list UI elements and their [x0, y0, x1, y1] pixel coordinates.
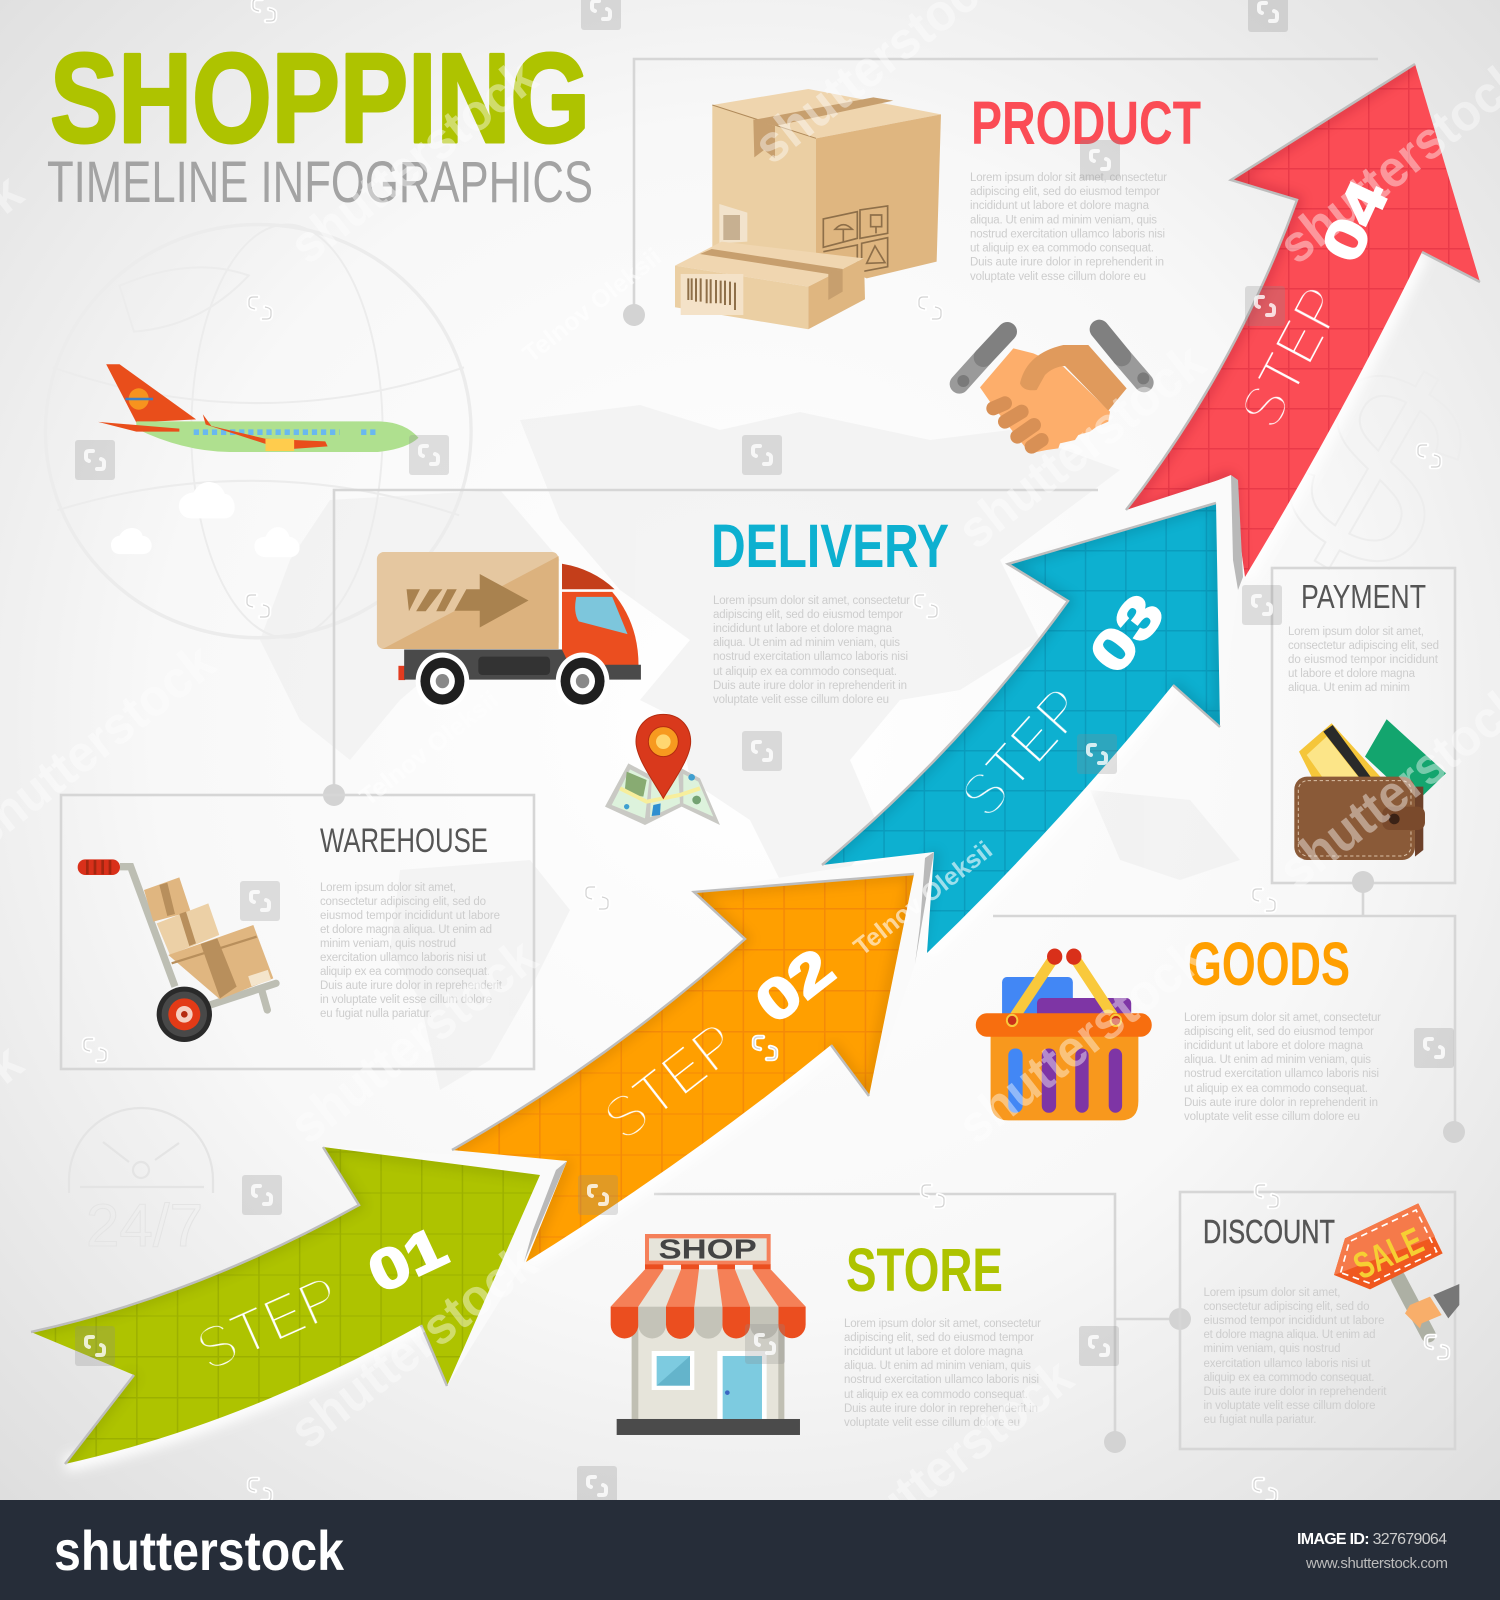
icon: wallet with card and cash	[1294, 719, 1446, 860]
panel: payment text: do eiusmod tempor incididunt	[1288, 654, 1439, 666]
paper flap over red arrow	[1008, 475, 1243, 727]
panel: goods text: ut aliquip ex ea commodo consequat.	[1184, 1083, 1368, 1095]
panel: goods text: nostrud exercitation ullamco laboris nisi	[1184, 1068, 1379, 1080]
panel: store text: aliqua. Ut enim ad minim veniam, quis	[844, 1360, 1031, 1372]
watermark text: Telnov Oleksii	[848, 836, 998, 961]
arrow: step 04 red: STEP	[1227, 275, 1356, 439]
panel: goods text: Duis aute irure dolor in reprehenderit in	[1184, 1097, 1378, 1109]
panel: product text: Lorem ipsum dolor sit amet, consectetur	[970, 172, 1167, 184]
icon: shop storefront: SHOP	[658, 1233, 757, 1264]
panel: goods text: aliqua. Ut enim ad minim veniam, quis	[1184, 1054, 1371, 1066]
panel: delivery text: Duis aute irure dolor in reprehenderit in	[713, 680, 907, 692]
watermark text: Telnov Oleksii	[517, 243, 667, 368]
panel: payment text: Lorem ipsum dolor sit amet,	[1288, 626, 1424, 638]
panel: delivery text: incididunt ut labore et dolore magna	[713, 623, 893, 635]
product connector	[623, 59, 1378, 326]
arrow: step 02 orange	[452, 874, 914, 1262]
panel: product text: voluptate velit esse cillum dolore eu	[970, 271, 1146, 283]
icon: sale sign in hand	[1334, 1203, 1459, 1335]
panel: product text: ut aliquip ex ea commodo consequat.	[970, 242, 1154, 254]
arrow: step 01 green: STEP	[186, 1262, 350, 1385]
panel: delivery text: nostrud exercitation ullamco laboris nisi	[713, 651, 908, 663]
panel: warehouse text: eiusmod tempor incididunt ut labore	[320, 910, 500, 922]
store connector	[654, 1194, 1191, 1453]
panel: store text: nostrud exercitation ullamco laboris nisi	[844, 1374, 1039, 1386]
website: www.shutterstock.com	[1305, 1555, 1448, 1572]
panel: warehouse text: exercitation ullamco laboris nisi ut	[320, 952, 487, 964]
panel: discount text: exercitation ullamco laboris nisi ut	[1204, 1358, 1371, 1370]
panel: store text: adipiscing elit, sed do eiusmod tempor	[844, 1332, 1034, 1344]
panel: discount text	[1203, 1213, 1387, 1426]
watermark text: Telnov Oleksii	[354, 686, 504, 811]
arrow: step 03 blue: STEP	[947, 674, 1097, 830]
panel: warehouse text	[320, 822, 503, 1020]
panel: goods text: Lorem ipsum dolor sit amet, consectetur	[1184, 1012, 1381, 1024]
panel: goods text: voluptate velit esse cillum dolore eu	[1184, 1111, 1360, 1123]
panel: discount text: DISCOUNT	[1203, 1213, 1335, 1250]
panel: discount text: Duis aute irure dolor in reprehenderit	[1204, 1386, 1387, 1398]
arrow: step 02 orange: STEP	[591, 1009, 750, 1154]
watermark text: shutterstock	[279, 1233, 548, 1460]
panel: warehouse text: Lorem ipsum dolor sit amet,	[320, 882, 456, 894]
panel: product text	[970, 89, 1201, 283]
panel: payment text: consectetur adipiscing elit, sed	[1288, 640, 1439, 652]
icon: airplane	[98, 364, 419, 452]
footer logo: shutterstock	[54, 1519, 345, 1582]
panel: delivery text: aliqua. Ut enim ad minim veniam, quis	[713, 637, 900, 649]
panel: payment text	[1288, 578, 1439, 694]
icon: sale sign in hand: SALE	[1347, 1219, 1430, 1287]
watermark text: shutterstock	[947, 928, 1216, 1155]
panel: store text: Duis aute irure dolor in reprehenderit in	[844, 1403, 1038, 1415]
panel: discount text: eu fugiat nulla pariatur.	[1204, 1414, 1316, 1426]
panel: discount text: consectetur adipiscing elit, sed do	[1204, 1301, 1370, 1313]
paper flap over blue arrow	[694, 852, 934, 1096]
panel: delivery text: ut aliquip ex ea commodo consequat.	[713, 666, 897, 678]
discount frame	[1180, 1192, 1455, 1449]
footer bar	[0, 1500, 1500, 1600]
watermark text: shutterstock	[815, 1348, 1084, 1575]
panel: delivery text: Lorem ipsum dolor sit amet, consectetur	[713, 595, 910, 607]
24/7 clock watermark	[69, 1108, 213, 1259]
icon: shopping basket	[976, 948, 1152, 1120]
paper flap over orange arrow	[323, 1147, 567, 1386]
panel: product text: incididunt ut labore et dolore magna	[970, 200, 1150, 212]
subtitle: TIMELINE INFOGRAPHICS	[47, 150, 593, 215]
panel: warehouse text: Duis aute irure dolor in reprehenderit	[320, 980, 503, 992]
icon: map and pin	[605, 714, 720, 825]
panel: warehouse text: et dolore magna aliqua. Ut enim ad	[320, 924, 492, 936]
arrow: step 03 blue	[822, 503, 1220, 964]
panel: product text: nostrud exercitation ullamco laboris nisi	[970, 228, 1165, 240]
title: shopping: SHOPPING	[50, 27, 590, 169]
panel: store text: STORE	[846, 1236, 1003, 1304]
goods connector	[993, 916, 1465, 1143]
icon: hand truck with boxes	[78, 859, 276, 1042]
arrow: step 03 blue: 03	[1077, 582, 1176, 684]
panel: delivery text: voluptate velit esse cillum dolore eu	[713, 694, 889, 706]
panel: discount text: et dolore magna aliqua. Ut enim ad	[1204, 1329, 1376, 1341]
panel: goods text: incididunt ut labore et dolore magna	[1184, 1040, 1364, 1052]
icon: shop storefront	[611, 1233, 806, 1435]
icon: cardboard boxes	[675, 89, 941, 329]
arrow: step 04 red	[1125, 63, 1480, 577]
globe watermark	[45, 224, 471, 638]
panel: payment text: PAYMENT	[1301, 578, 1426, 615]
panel: product text: aliqua. Ut enim ad minim veniam, quis	[970, 214, 1157, 226]
panel: discount text: minim veniam, quis nostrud	[1204, 1343, 1340, 1355]
panel: store text: voluptate velit esse cillum dolore eu	[844, 1417, 1020, 1429]
panel: delivery text: DELIVERY	[711, 512, 949, 580]
arrow: step 04 red: 04	[1309, 172, 1400, 271]
panel: store text: Lorem ipsum dolor sit amet, consectetur	[844, 1318, 1041, 1330]
panel: store text: ut aliquip ex ea commodo consequat.	[844, 1389, 1028, 1401]
panel: warehouse text: eu fugiat nulla pariatur.	[320, 1008, 432, 1020]
panel: goods text: adipiscing elit, sed do eiusmod tempor	[1184, 1026, 1374, 1038]
watermark text: shutterstock	[279, 48, 548, 275]
arrow: step 02 orange: 02	[743, 936, 845, 1035]
panel: discount text: in voluptate velit esse cillum dolore	[1204, 1400, 1376, 1412]
watermark text: shutterstock	[279, 928, 548, 1155]
panel: payment text: aliqua. Ut enim ad minim	[1288, 682, 1410, 694]
panel: discount text: eiusmod tempor incididunt ut labore	[1204, 1315, 1384, 1327]
panel: product text: adipiscing elit, sed do eiusmod tempor	[970, 186, 1160, 198]
panel: goods text: GOODS	[1188, 930, 1350, 998]
icon: clouds	[111, 482, 300, 557]
icon: delivery truck	[377, 552, 641, 710]
panel: product text: PRODUCT	[971, 89, 1201, 157]
panel: delivery text	[711, 512, 949, 706]
world map watermark	[260, 405, 1240, 1090]
warehouse frame	[61, 795, 534, 1069]
panel: warehouse text: in voluptate velit esse cillum dolore	[320, 994, 492, 1006]
panel: payment text: ut labore et dolore magna	[1288, 668, 1416, 680]
panel: product text: Duis aute irure dolor in reprehenderit in	[970, 256, 1164, 268]
watermark text: shutterstock	[947, 333, 1216, 560]
image id: IMAGE ID: 327679064	[1297, 1531, 1447, 1548]
24/7 clock watermark: 24/7	[86, 1192, 203, 1259]
panel: warehouse text: minim veniam, quis nostrud	[320, 938, 456, 950]
payment frame	[1272, 568, 1455, 916]
panel: warehouse text: aliquip ex ea commodo consequat.	[320, 966, 490, 978]
panel: discount text: Lorem ipsum dolor sit amet,	[1204, 1287, 1340, 1299]
arrow: step 01 green: 01	[359, 1214, 456, 1304]
delivery connector	[323, 490, 1098, 806]
panel: discount text: aliquip ex ea commodo consequat.	[1204, 1372, 1374, 1384]
icon: handshake	[957, 329, 1149, 453]
arrow: step 01 green	[31, 1147, 540, 1464]
panel: goods text	[1184, 930, 1381, 1123]
panel: store text	[844, 1236, 1041, 1429]
panel: warehouse text: consectetur adipiscing elit, sed do	[320, 896, 486, 908]
panel: delivery text: adipiscing elit, sed do eiusmod tempor	[713, 609, 903, 621]
panel: warehouse text: WAREHOUSE	[320, 822, 488, 860]
panel: store text: incididunt ut labore et dolore magna	[844, 1346, 1024, 1358]
